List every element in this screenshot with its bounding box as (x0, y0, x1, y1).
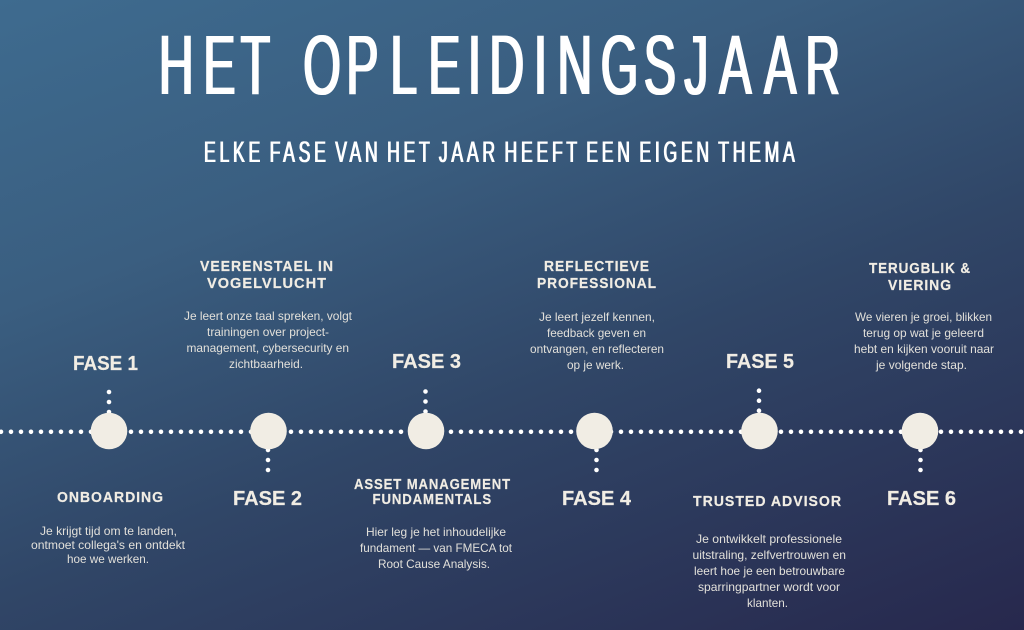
phase 3 (354, 351, 513, 571)
fase 3 heading: ASSET MANAGEMENT (354, 477, 511, 493)
fase 6 heading: TERUGBLIK & (869, 261, 971, 277)
fase 5 connector dots (757, 391, 761, 412)
fase 4 label: FASE 4 (562, 488, 632, 510)
fase 3 description (360, 525, 513, 571)
fase 5 description: klanten. (747, 596, 788, 610)
fase 4 heading: REFLECTIEVE (544, 259, 650, 275)
fase 2 heading: VOGELVLUCHT (207, 276, 327, 292)
fase 1 description: Je krijgt tijd om te landen, (40, 524, 177, 538)
fase 6 heading (869, 261, 971, 294)
phase 1 (31, 353, 186, 566)
fase 3 heading (354, 477, 511, 508)
phase 5 (692, 351, 846, 610)
fase 2 heading: VEERENSTAEL IN (200, 259, 334, 275)
fase 3 node (408, 413, 444, 449)
title: HET OPLEIDINGSJAAR (159, 18, 840, 112)
fase 1 description: hoe we werken. (67, 552, 149, 566)
fase 5 description (692, 532, 846, 610)
fase 2 node (250, 413, 287, 449)
subtitle: ELKE FASE VAN HET JAAR HEEFT EEN EIGEN THEMA (204, 136, 795, 169)
fase 6 description (854, 310, 994, 372)
fase 4 heading: PROFESSIONAL (537, 276, 657, 292)
fase 6 connector dots (918, 450, 923, 471)
phase 6 (854, 261, 994, 510)
fase 5 label: FASE 5 (726, 351, 794, 373)
fase 2 label: FASE 2 (233, 488, 302, 510)
fase 6 label: FASE 6 (887, 488, 956, 510)
fase 1 node (91, 413, 127, 449)
fase 5 heading: TRUSTED ADVISOR (693, 494, 842, 510)
fase 3 connector dots (423, 392, 428, 412)
fase 3 description: Root Cause Analysis. (378, 557, 490, 571)
fase 4 description (530, 310, 664, 372)
fase 4 description: Je leert jezelf kennen, (539, 310, 655, 324)
fase 2 description: Je leert onze taal spreken, volgt (184, 309, 353, 323)
fase 1 connector dots (107, 392, 111, 413)
fase 4 description: ontvangen, en reflecteren (530, 342, 664, 356)
fase 5 description: leert hoe je een betrouwbare (694, 564, 845, 578)
fase 2 heading (200, 259, 334, 292)
fase 6 heading: VIERING (888, 278, 952, 294)
timeline: dotted line (1, 429, 1024, 434)
fase 1 description (31, 524, 186, 566)
phase 2 (184, 259, 353, 510)
fase 1 label: FASE 1 (73, 353, 138, 375)
fase 3 heading: FUNDAMENTALS (372, 492, 492, 508)
phase 4 (530, 259, 664, 510)
fase 2 connector dots (266, 450, 270, 471)
fase 6 node (902, 413, 938, 449)
fase 4 node (576, 413, 613, 449)
fase 6 description: We vieren je groei, blikken (855, 310, 992, 324)
fase 4 description: feedback geven en (547, 326, 646, 340)
fase 4 description: op je werk. (567, 358, 624, 372)
fase 3 description: Hier leg je het inhoudelijke (366, 525, 506, 539)
fase 5 description: sparringpartner wordt voor (698, 580, 840, 594)
fase 1 heading: ONBOARDING (57, 490, 164, 506)
fase 4 connector dots (594, 450, 599, 471)
fase 2 description: management, cybersecurity en (186, 341, 349, 355)
fase 3 label: FASE 3 (392, 351, 461, 373)
fase 6 description: terug op wat je geleerd (863, 326, 984, 340)
fase 3 description: fundament — van FMECA tot (360, 541, 513, 555)
fase 2 description: zichtbaarheid. (229, 357, 303, 371)
fase 5 description: uitstraling, zelfvertrouwen en (692, 548, 846, 562)
fase 5 description: Je ontwikkelt professionele (696, 532, 842, 546)
fase 2 description (184, 309, 353, 371)
fase 4 heading (537, 259, 657, 292)
fase 1 description: ontmoet collega's en ontdekt (31, 538, 186, 552)
fase 6 description: je volgende stap. (875, 358, 967, 372)
fase 6 description: hebt en kijken vooruit naar (854, 342, 994, 356)
fase 2 description: trainingen over project- (207, 325, 329, 339)
fase 5 node (741, 413, 778, 449)
